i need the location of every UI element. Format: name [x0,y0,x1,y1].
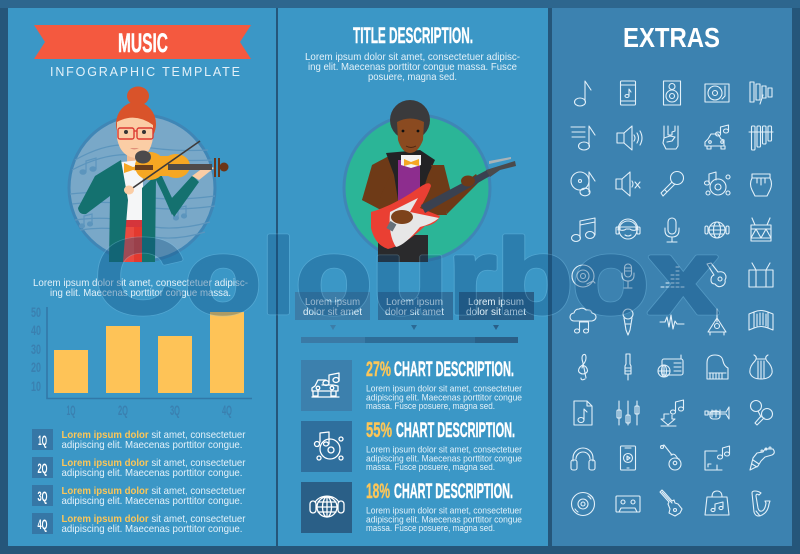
chart description 1: adipiscing elit. Maecenas porttitor congue [366,391,522,402]
bar chart: 20 [31,359,41,375]
heading: TITLE DESCRIPTION. [353,23,473,48]
icon: globe with headphones [310,496,344,517]
icon grid [570,81,774,516]
chart description 1: 27% [366,358,391,381]
legend list: 4Q [38,516,48,532]
chart description 3: Lorem ipsum dolor sit amet, consectetuer [366,504,522,516]
subtitle: INFOGRAPHIC TEMPLATE [50,65,240,79]
watermark: Colourbox [95,218,718,336]
heading: extras: EXTRAS [623,22,720,53]
chart description 2: CHART DESCRIPTION. [396,419,515,442]
callout bubbles: Lorem ipsum [305,297,360,308]
callout bubbles [295,292,534,330]
callout bubbles: dolor sit amet [303,307,362,318]
bar chart [31,304,252,418]
chart description 2 [301,419,522,472]
legend list: adipiscing elit. Maecenas porttitor congue. [62,468,242,479]
legend list: Lorem ipsum dolor sit amet, consectetuer [62,514,246,525]
description: Lorem ipsum dolor sit amet, consectetuer adipisc- [305,52,520,63]
legend list: adipiscing elit. Maecenas porttitor congue. [62,524,242,535]
icon: speaker with notes [314,432,343,460]
panel: extras [552,8,792,546]
intro text: Lorem ipsum dolor sit amet, consectetuer adipisc- [33,278,248,289]
bar chart: 3Q [170,402,180,418]
callout bubbles: Lorem ipsum [386,297,443,308]
callout bubbles: dolor sit amet [385,307,444,318]
chart description 2: Lorem ipsum dolor sit amet, consectetuer [366,444,522,454]
bar chart: 2Q [118,402,128,418]
legend list: Lorem ipsum dolor sit amet, consectetuer [62,430,246,441]
bar chart: 4Q [222,402,232,418]
description: ing elit. Maecenas porttitor congue massa. Fusce [308,62,517,73]
callout bubbles: Lorem ipsum [468,297,524,308]
chart description 3: massa. Fusce posuere, magna sed. [366,522,495,533]
bar chart: 40 [31,322,41,338]
intro text [33,278,248,299]
callout bubbles: dolor sit amet [466,307,526,318]
icon: car with notes [312,373,339,397]
description [305,52,520,83]
legend list [32,429,246,535]
bar chart: 10 [31,378,41,394]
legend list: adipiscing elit. Maecenas porttitor congue. [62,440,242,451]
bar chart: 30 [31,341,41,357]
watermark: Colourbox [95,218,718,336]
illustration: guitarist [344,100,516,263]
legend list: 3Q [38,488,48,504]
chart description 2: massa. Fusce posuere, magna sed. [366,461,495,472]
chart description 3: 18% [366,480,390,503]
title ribbon [34,25,251,59]
chart description 1: CHART DESCRIPTION. [394,358,514,381]
chart description 3 [301,480,522,533]
progress bar [301,337,518,343]
legend list: Lorem ipsum dolor sit amet, consectetuer [62,486,246,497]
bar chart: 50 [31,304,41,320]
title ribbon: MUSIC [118,28,168,58]
chart description 2: 55% [366,419,392,442]
legend list: Lorem ipsum dolor sit amet, consectetuer [62,458,246,469]
legend list: 2Q [38,460,48,476]
intro text: ing elit. Maecenas porttitor congue massa. [50,288,231,299]
legend list: 1Q [38,432,47,448]
chart description 3: adipiscing elit. Maecenas porttitor congue [366,513,522,524]
panel: left [8,8,276,546]
description: posuere, magna sed. [368,72,457,83]
illustration: violinist [69,86,228,264]
bar chart: 1Q [66,402,76,418]
chart description 1: Lorem ipsum dolor sit amet, consectetuer [366,382,522,394]
chart description 1: massa. Fusce posuere, magna sed. [366,400,495,411]
chart description 2: adipiscing elit. Maecenas porttitor congue [366,452,522,463]
chart description 3: CHART DESCRIPTION. [394,480,513,503]
panel: middle [278,8,548,546]
legend list: adipiscing elit. Maecenas porttitor congue. [62,496,242,507]
chart description 1 [301,358,522,411]
